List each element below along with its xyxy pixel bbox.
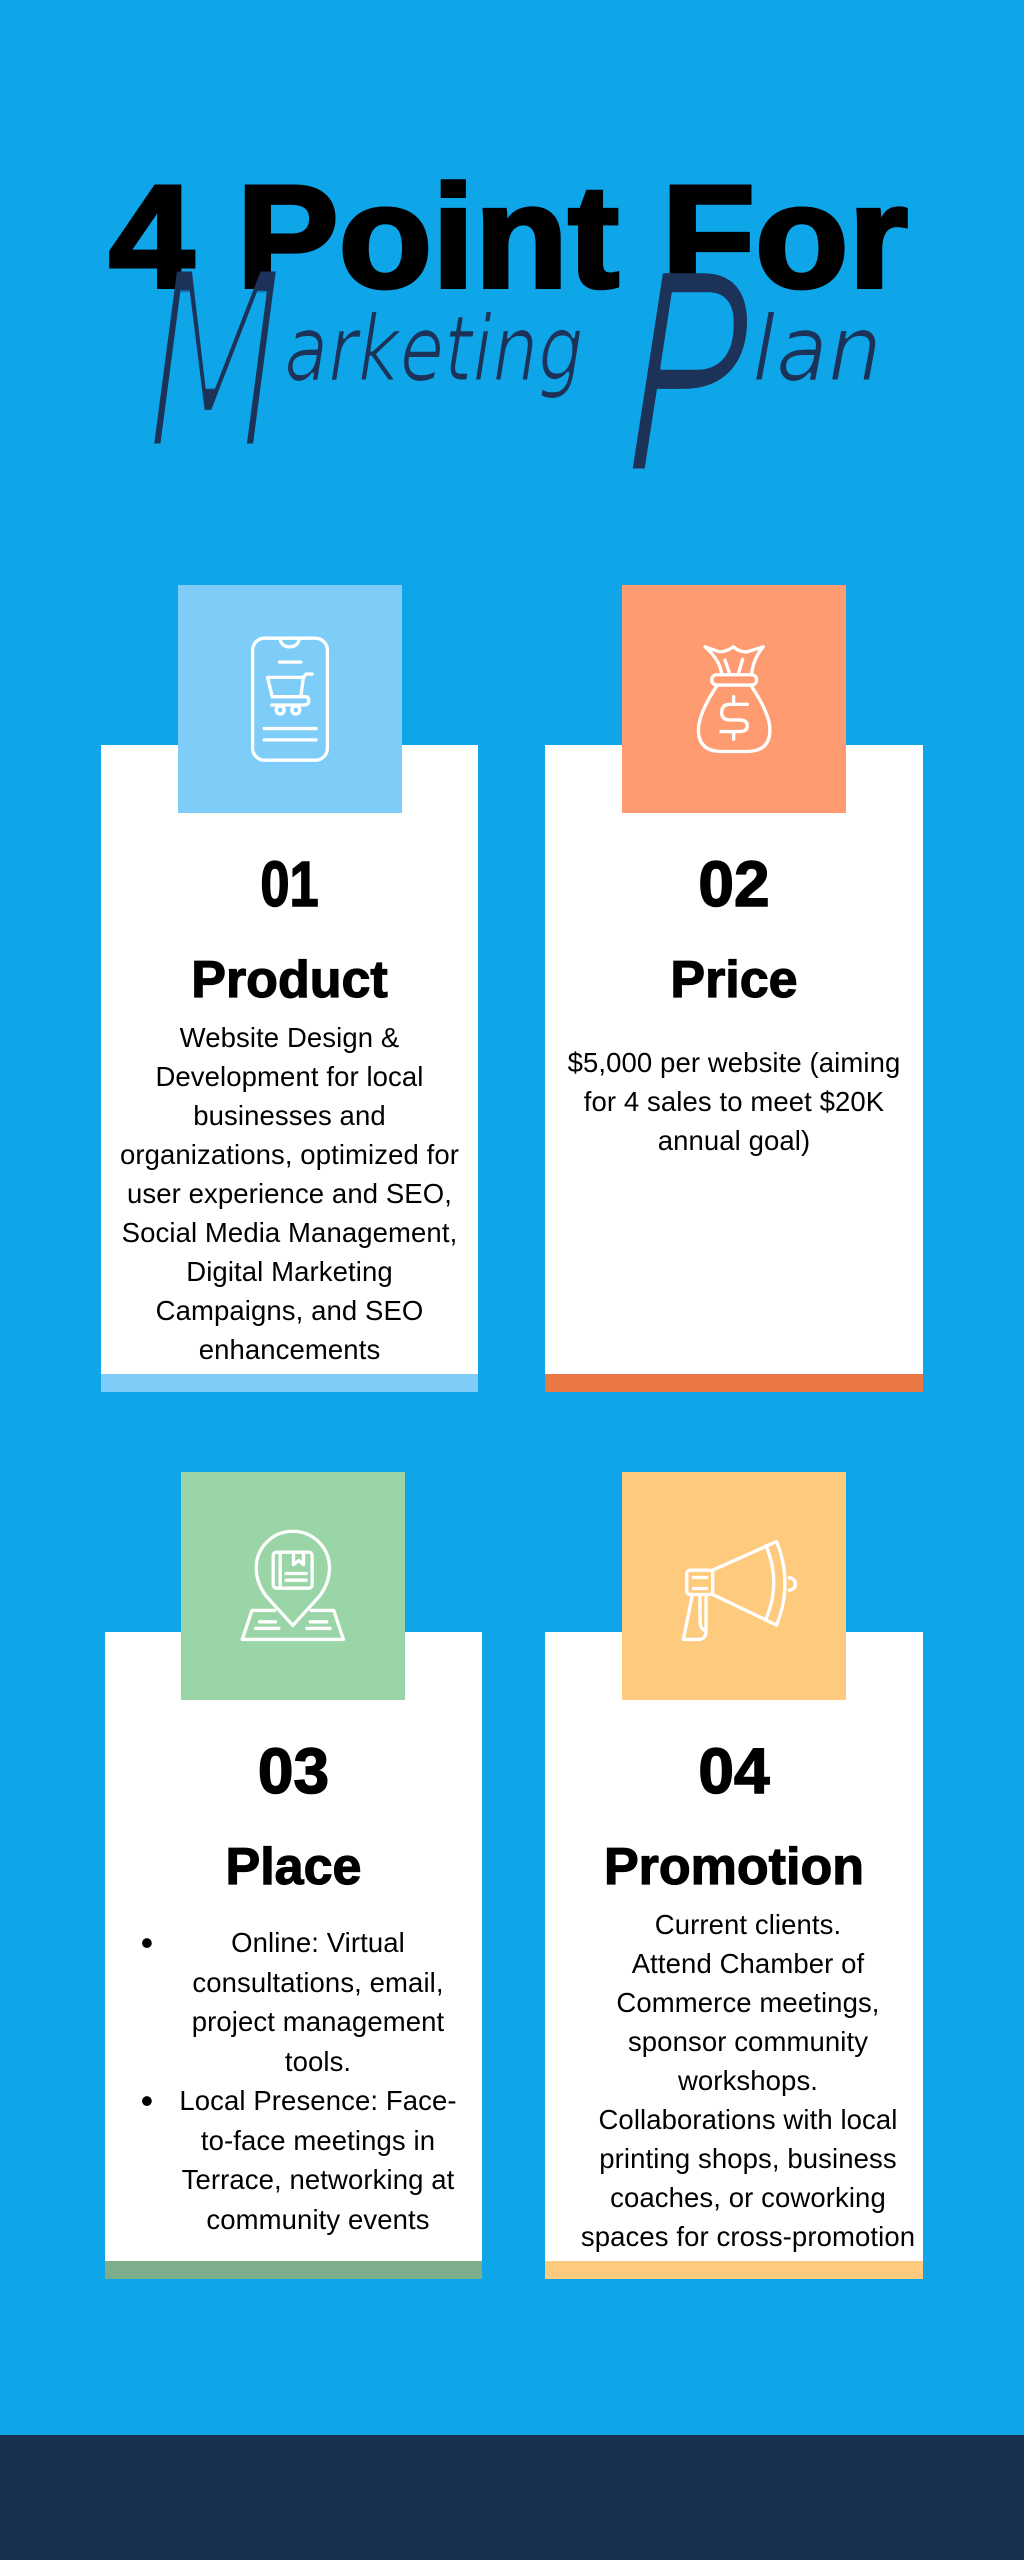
list text: tools.: [285, 2046, 351, 2076]
body text: [581, 1909, 915, 2252]
icon: money bag: [622, 585, 846, 813]
card background: [105, 1632, 482, 2279]
body text: [568, 1047, 900, 1156]
body text: Website Design &: [180, 1022, 399, 1053]
title line: 4 Point For: 4 Point For: [109, 155, 908, 318]
icon: phone with shopping cart: [178, 585, 402, 813]
accent bar: [545, 1374, 923, 1392]
body text: user experience and SEO,: [127, 1178, 452, 1209]
footer band: [0, 2435, 1024, 2560]
body text: Current clients.: [655, 1909, 841, 1940]
script subtitle: Marketing Plan: arketing: [284, 297, 584, 402]
bullet 2: •: [141, 2080, 153, 2121]
body text: $5,000 per website (aiming: [568, 1047, 900, 1078]
body text: enhancements: [199, 1334, 380, 1365]
body text: annual goal): [658, 1125, 810, 1156]
bullet list: [141, 1922, 457, 2235]
panel: price: [545, 585, 923, 1392]
panel: product: [101, 585, 478, 1392]
list text: Online: Virtual: [231, 1927, 405, 1958]
number 02: 02: [698, 848, 770, 920]
list text: community events: [206, 2204, 430, 2234]
body text: Collaborations with local: [598, 2104, 898, 2135]
icon: megaphone: [622, 1472, 846, 1700]
list text: consultations, email,: [192, 1966, 444, 1998]
number 01: 01: [260, 848, 319, 920]
body text: businesses and: [193, 1100, 386, 1131]
list text: Terrace, networking at: [182, 2164, 454, 2195]
body text: Social Media Management,: [122, 1217, 457, 1248]
accent bar: [105, 2261, 482, 2279]
heading: Product: Product: [191, 951, 388, 1009]
number 04: 04: [698, 1735, 770, 1807]
body text: Campaigns, and SEO: [156, 1295, 423, 1326]
list text: to-face meetings in: [201, 2124, 435, 2156]
body text: Attend Chamber of: [632, 1948, 864, 1979]
heading: Place: Place: [226, 1838, 361, 1896]
panel: place: [105, 1472, 482, 2279]
body text: for 4 sales to meet $20K: [584, 1086, 884, 1117]
list text: Local Presence: Face-: [179, 2085, 457, 2116]
body text: spaces for cross-promotion: [581, 2221, 915, 2252]
body text: sponsor community: [628, 2026, 868, 2057]
number 03: 03: [258, 1735, 329, 1807]
body text: workshops.: [678, 2065, 818, 2096]
list text: project management: [192, 2006, 444, 2037]
bullet 1: •: [141, 1922, 153, 1963]
heading: Price: Price: [670, 951, 798, 1009]
script subtitle: Marketing Plan: [145, 219, 882, 535]
card background: [545, 1632, 923, 2279]
body text: Digital Marketing: [186, 1256, 393, 1287]
script subtitle: Marketing Plan: lan: [752, 297, 882, 402]
body text: Commerce meetings,: [616, 1987, 880, 2018]
icon: map pin with book: [181, 1472, 405, 1700]
body text: printing shops, business: [599, 2143, 897, 2174]
card background: [545, 745, 923, 1392]
title: [109, 155, 908, 490]
heading: Promotion: Promotion: [604, 1838, 864, 1896]
list text: [179, 1927, 457, 2235]
body text: coaches, or coworking: [610, 2182, 886, 2213]
accent bar: [101, 1374, 478, 1392]
card background: [101, 745, 478, 1392]
panel: promotion: [545, 1472, 923, 2279]
body text: organizations, optimized for: [120, 1139, 459, 1170]
accent bar: [545, 2261, 923, 2279]
body text: [120, 1022, 459, 1365]
body text: Development for local: [155, 1061, 424, 1092]
